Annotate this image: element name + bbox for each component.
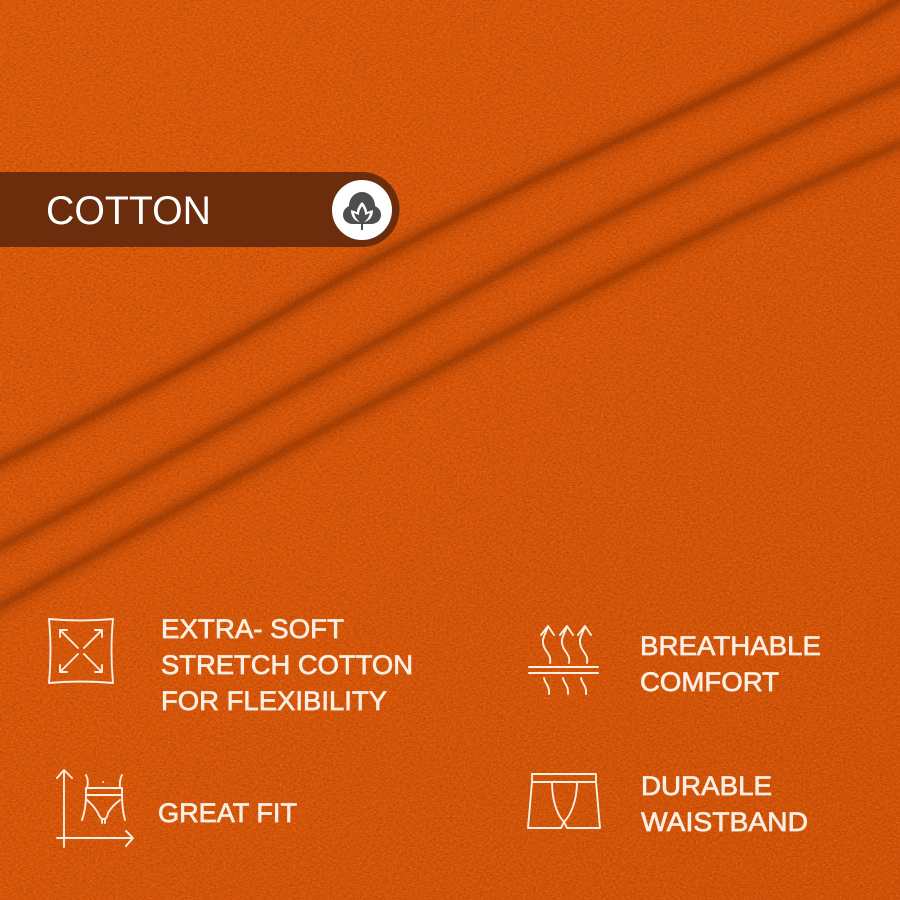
text: breathable comfort: BREATHABLE	[640, 631, 821, 661]
icon: durable waistband trunks	[528, 774, 600, 828]
heading: cotton: COTTON	[46, 189, 211, 233]
text: breathable comfort: COMFORT	[640, 667, 779, 697]
icon: cotton boll	[332, 180, 392, 240]
icon: stretch fabric	[49, 619, 113, 683]
text: extra soft: EXTRA- SOFT	[161, 614, 344, 644]
text: durable waistband: DURABLE	[641, 771, 772, 801]
text: great fit: GREAT FIT	[158, 798, 297, 828]
text: durable waistband	[641, 771, 808, 837]
text: extra soft: STRETCH COTTON	[161, 650, 413, 680]
icon: breathable layers	[529, 626, 598, 694]
text: durable waistband: WAISTBAND	[641, 807, 808, 837]
banner: cotton	[0, 172, 400, 247]
text: extra soft	[161, 614, 413, 716]
text: breathable comfort	[640, 631, 821, 697]
icon: great fit	[57, 770, 133, 847]
text: extra soft: FOR FLEXIBILITY	[161, 686, 387, 716]
